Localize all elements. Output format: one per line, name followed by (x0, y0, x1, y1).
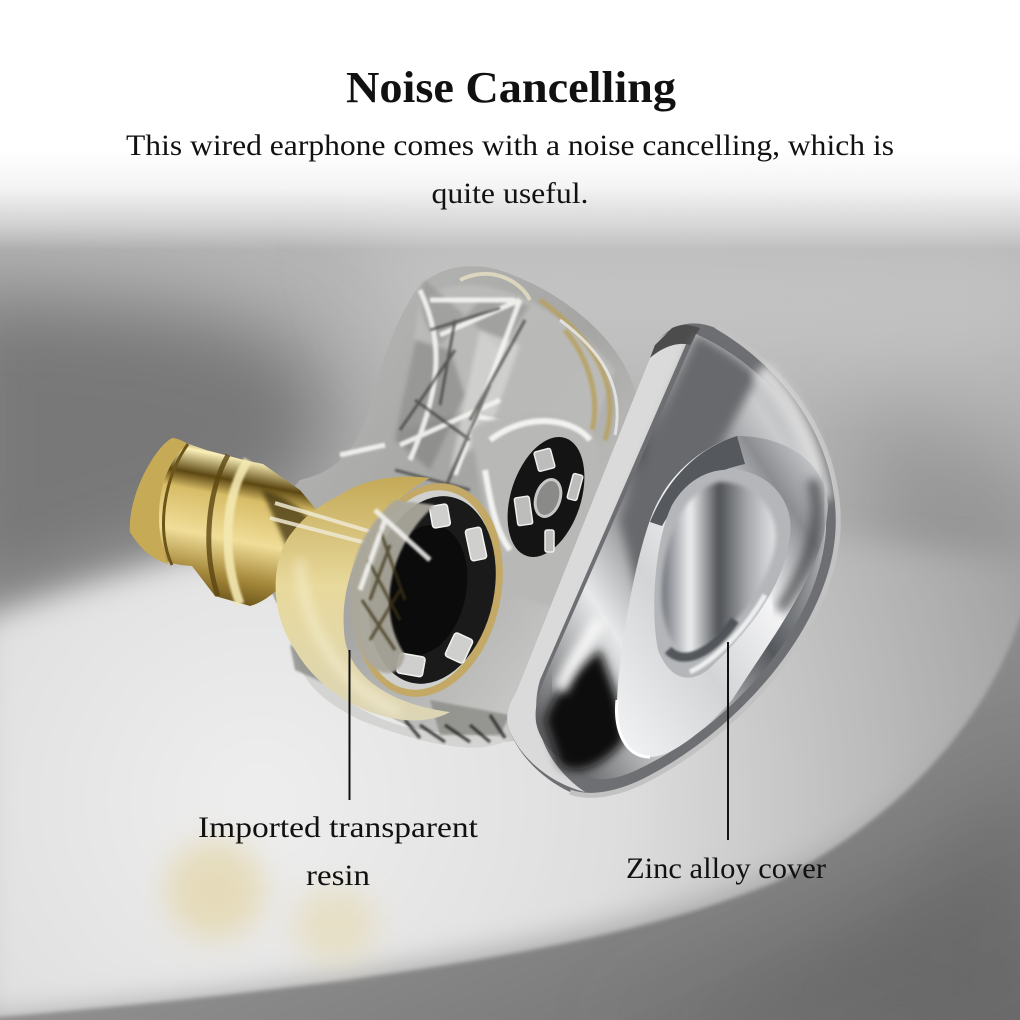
resin facets over driver (350, 500, 435, 673)
cover face (536, 334, 826, 779)
large driver with gold ring (334, 469, 522, 711)
callout: zinc alloy cover: Zinc alloy cover (626, 852, 826, 885)
zinc alloy cover (507, 323, 838, 795)
callout: imported transparent resin: Imported transparent (198, 811, 479, 844)
cover dish ring (617, 436, 828, 757)
gold nozzle (130, 438, 325, 606)
description text: quite useful. (432, 177, 588, 210)
gold band on resin (270, 477, 450, 720)
callout: imported transparent resin (198, 650, 479, 892)
cover plate (507, 323, 838, 795)
transparent resin shell (250, 266, 640, 748)
cover centre recess (654, 469, 790, 678)
description text: This wired earphone comes with a noise cancelling, which is (126, 129, 894, 162)
earphone illustration (130, 266, 838, 795)
description text (126, 129, 894, 210)
callout: imported transparent resin: resin (306, 859, 370, 892)
small rear driver (494, 427, 598, 567)
white top fade (0, 0, 1020, 250)
title: Noise Cancelling (346, 63, 676, 112)
